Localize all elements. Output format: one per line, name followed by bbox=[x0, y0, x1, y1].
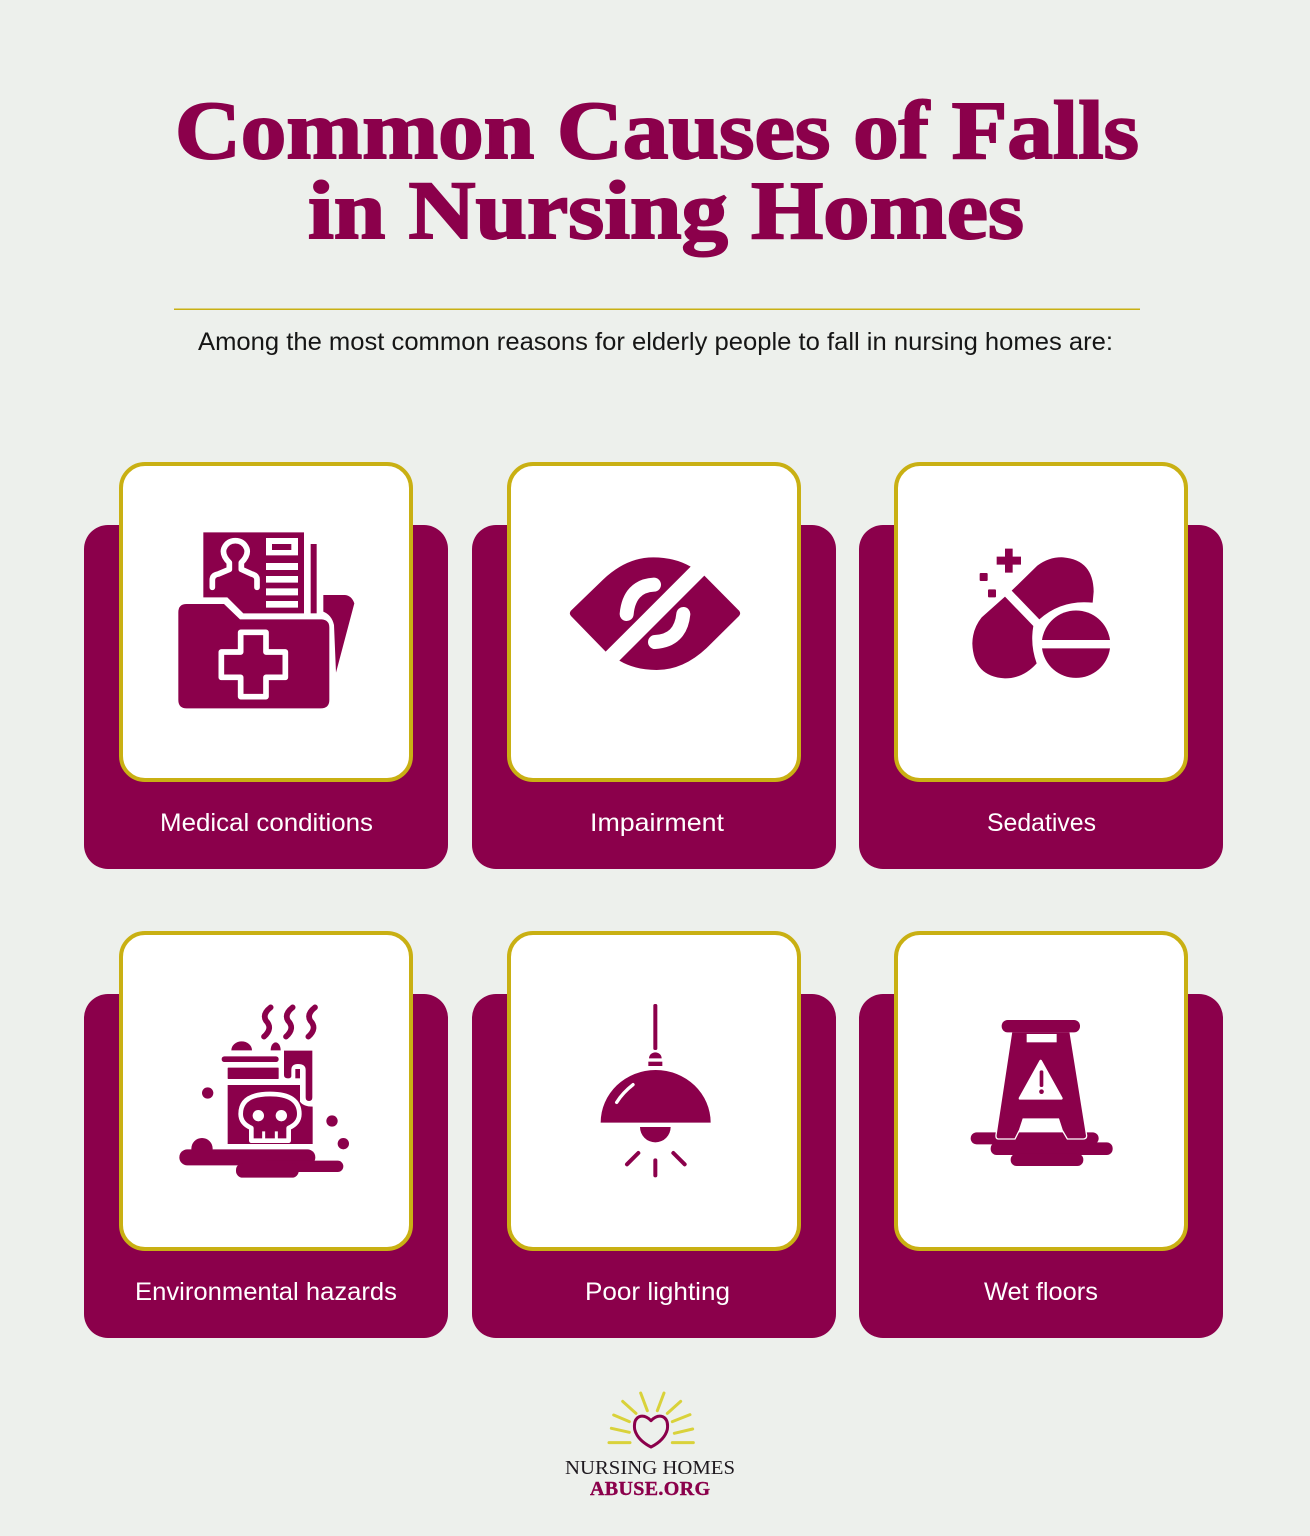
panel: sedatives bbox=[859, 464, 1223, 869]
title bbox=[175, 84, 1139, 256]
panel: wet floors bbox=[859, 933, 1223, 1338]
logo bbox=[565, 1393, 735, 1500]
icon: crossed-out eye bbox=[570, 557, 740, 670]
icon: medical folder bbox=[178, 532, 354, 708]
label: Impairment bbox=[590, 809, 724, 837]
label: Environmental hazards bbox=[135, 1278, 397, 1306]
panel: poor lighting bbox=[472, 933, 836, 1338]
label: Wet floors bbox=[984, 1278, 1098, 1306]
icon: toxic container bbox=[179, 1007, 349, 1178]
title: in Nursing Homes bbox=[308, 164, 1024, 256]
title: Common Causes of Falls bbox=[175, 84, 1139, 176]
icon: hanging lamp bbox=[601, 1004, 711, 1175]
label: Sedatives bbox=[987, 809, 1096, 837]
label: Poor lighting bbox=[585, 1278, 730, 1306]
icon: wet floor sign bbox=[971, 1020, 1113, 1166]
icon: pills bbox=[972, 549, 1110, 678]
panel: environmental hazards bbox=[84, 933, 448, 1338]
subtitle text: Among the most common reasons for elderly people to fall in nursing homes are: bbox=[198, 328, 1113, 356]
panel: impairment bbox=[472, 464, 836, 869]
panel: medical conditions bbox=[84, 464, 448, 869]
label: Medical conditions bbox=[160, 809, 373, 837]
logo: ABUSE.ORG bbox=[590, 1478, 710, 1500]
logo: NURSING HOMES bbox=[565, 1457, 735, 1479]
icon: heart with sun rays bbox=[609, 1393, 693, 1447]
